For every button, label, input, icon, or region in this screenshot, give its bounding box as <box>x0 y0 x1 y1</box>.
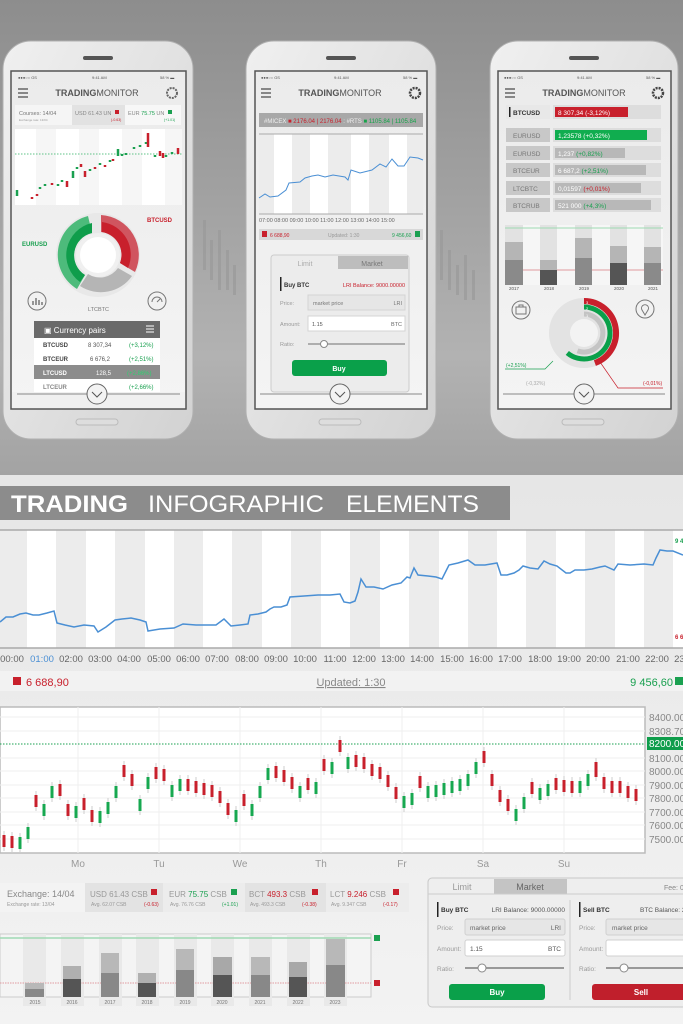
currency bars list: LTCBTC <box>513 186 538 193</box>
currency bars list: 521 000 (+4,3%) <box>558 203 606 210</box>
currency pairs panel: 128,5 <box>96 371 112 377</box>
yearly bar chart: 2016 <box>66 1000 78 1006</box>
header: hamburger, title, gear <box>18 88 177 98</box>
ring chart: (-0,01%) <box>643 381 663 387</box>
order form: LRI Balance: 9000.00000 <box>343 283 405 289</box>
currency bars list: 1,23578 (+0,32%) <box>558 133 610 140</box>
mini candle chart <box>15 129 182 205</box>
exchange rates row: EUR 75.75 CSB <box>169 890 227 899</box>
big intraday line chart: 08:00 <box>235 654 259 665</box>
buy section: LRI <box>551 925 561 932</box>
exchange rates row: Avg. 493.3 CSB <box>250 902 286 908</box>
yearly bar chart: 2023 <box>329 1000 341 1006</box>
currency pairs panel: (+2,86%) <box>127 371 152 377</box>
currency pairs panel: BTCUSD <box>43 343 69 349</box>
ticker bar: #MICEX ■ 2176.04 | 2176.04 : #RTS ■ 1105.84 | 1105.84 <box>264 119 417 125</box>
icon: bar chart circle <box>28 292 46 310</box>
order form: LRI <box>393 301 402 307</box>
candlestick chart: Th <box>315 859 327 870</box>
currency pairs panel: (+2,51%) <box>129 357 154 363</box>
big intraday line chart: 05:00 <box>147 654 171 665</box>
phone middle: 58 % ▬ <box>403 75 417 80</box>
ring chart <box>505 300 663 388</box>
buy section: LRI Balance: 9000.00000 <box>492 907 565 914</box>
yearly bar chart: 2022 <box>292 1000 304 1006</box>
currency pairs panel: (+3,12%) <box>129 343 154 349</box>
order form: Buy BTC <box>284 283 310 289</box>
background bottom <box>0 475 683 1024</box>
sell section: market price <box>612 925 648 932</box>
courses row <box>15 105 181 125</box>
yearly bar chart: 2015 <box>29 1000 41 1006</box>
price row: Updated: 1:30 <box>328 233 360 239</box>
courses row: EUR 75.75 UN <box>128 111 164 117</box>
header <box>261 88 420 98</box>
big intraday line chart: 10:00 <box>293 654 317 665</box>
phone middle <box>246 41 436 439</box>
yearly bar chart: 2018 <box>141 1000 153 1006</box>
buy section: BTC <box>548 946 561 953</box>
price summary row <box>0 671 683 691</box>
big intraday line chart: 21:00 <box>616 654 640 665</box>
currency pairs panel: BTCEUR <box>43 357 69 363</box>
buy section: Amount: <box>437 946 461 953</box>
order form: Ratio: <box>280 342 295 348</box>
ring chart: 2 <box>586 306 589 311</box>
exchange rates row: Avg. 62.07 CSB <box>91 902 127 908</box>
phone right: 9:41 AM <box>577 75 592 80</box>
courses row: Courses: 14/04 <box>19 111 56 117</box>
phone middle: 9:41 AM <box>334 75 349 80</box>
scroll control <box>260 384 422 404</box>
scroll control <box>503 384 665 404</box>
price summary row: 6 688,90 <box>26 677 69 689</box>
buy section: Buy BTC <box>441 907 469 914</box>
order form <box>271 255 409 392</box>
big intraday line chart: 01:00 <box>30 654 54 665</box>
line chart: 07:00 08:00 09:00 10:00 11:00 12:00 13:00 14:00 15:00 <box>259 218 395 224</box>
phone right <box>490 41 678 439</box>
big intraday line chart: 02:00 <box>59 654 83 665</box>
order panel: buy / sell: Market <box>516 882 544 892</box>
icon: briefcase <box>512 301 530 319</box>
price summary row: Updated: 1:30 <box>316 677 386 689</box>
candlestick chart <box>0 707 683 870</box>
big intraday line chart: 13:00 <box>381 654 405 665</box>
big intraday line chart: 03:00 <box>88 654 112 665</box>
exchange rates row: (-0.17) <box>383 902 398 908</box>
order form: BTC <box>391 322 402 328</box>
order panel: buy / sell <box>428 878 683 1007</box>
sell section: Sell BTC <box>583 907 610 914</box>
big intraday line chart: 00:00 <box>0 654 24 665</box>
currency pairs panel: 6 676,2 <box>90 357 111 363</box>
candlestick chart: Mo <box>71 859 85 870</box>
order form: Market <box>361 261 383 268</box>
candlestick chart: Sa <box>477 859 490 870</box>
icon: location pin <box>636 300 654 318</box>
header: TRADINGMONITOR <box>542 88 626 98</box>
big intraday line chart: 14:00 <box>410 654 434 665</box>
ring chart: 1 <box>586 313 589 318</box>
order form: Limit <box>298 261 312 268</box>
currency bars list: BTCRUB <box>513 203 540 210</box>
courses row: USD 61.43 UN <box>75 111 111 117</box>
bar chart: 2021 <box>648 286 659 291</box>
currency bars list: 0,01597 (+0,01%) <box>558 186 610 193</box>
bar chart: 2018 <box>544 286 555 291</box>
exchange rates row: USD 61.43 CSB <box>90 890 148 899</box>
big intraday line chart <box>0 530 683 665</box>
exchange rates row: LCT 9.246 CSB <box>330 890 386 899</box>
big intraday line chart: 20:00 <box>586 654 610 665</box>
header: TRADINGMONITOR <box>298 88 382 98</box>
yearly bar chart: 2021 <box>254 1000 266 1006</box>
candlestick chart: Tu <box>153 859 165 870</box>
header: hamburger, title, gear: TRADINGMONITOR <box>55 88 139 98</box>
icon: gauge circle <box>148 292 166 310</box>
currency pairs panel: 8 307,34 <box>88 343 112 349</box>
title banner: TRADING <box>11 491 128 518</box>
scroll control <box>12 384 185 408</box>
phone right: 58 % ▬ <box>646 75 660 80</box>
ticker bar <box>259 113 423 127</box>
sell section: Amount: <box>579 946 603 953</box>
exchange rates row: Exchange: 14/04 <box>7 889 75 899</box>
yearly bar chart: 2019 <box>179 1000 191 1006</box>
buy section: market price <box>470 925 506 932</box>
order form: Price: <box>280 301 295 307</box>
phone right: ●●●○○ GS <box>504 75 523 80</box>
bar chart <box>505 225 663 291</box>
currency bars list: BTCUSD <box>513 110 540 117</box>
yearly bar chart: 2017 <box>104 1000 116 1006</box>
exchange rates row: (+1.01) <box>222 902 238 908</box>
big intraday line chart: 12:00 <box>352 654 376 665</box>
currency pairs panel: LTCEUR <box>43 385 68 391</box>
big intraday line chart: 09:00 <box>264 654 288 665</box>
title banner: ELEMENTS <box>346 491 479 518</box>
phone middle: ●●●○○ GS <box>261 75 280 80</box>
line chart <box>259 134 423 224</box>
exchange rates row: Avg. 9.347 CSB <box>331 902 367 908</box>
bar chart: 2020 <box>614 286 625 291</box>
exchange rates row: (-0.38) <box>302 902 317 908</box>
big intraday line chart: 06:00 <box>176 654 200 665</box>
currency pairs panel: LTCUSD <box>43 371 68 377</box>
status bar: ●●●○○ GS <box>18 75 37 80</box>
title banner <box>0 486 510 520</box>
title banner: INFOGRAPHIC <box>148 491 324 518</box>
currency bars list <box>506 105 661 212</box>
candlestick chart: We <box>233 859 248 870</box>
currency bars list: 1,237 (+0,82%) <box>558 151 603 158</box>
big intraday line chart: 22:00 <box>645 654 669 665</box>
order form: Buy <box>332 366 346 373</box>
candlestick chart: Fr <box>397 859 407 870</box>
big intraday line chart: 16:00 <box>469 654 493 665</box>
currency bars list: BTCEUR <box>513 168 540 175</box>
big intraday line chart: 11:00 <box>323 654 347 665</box>
header <box>505 88 663 98</box>
currency pairs panel: ▣ Currency pairs <box>44 326 106 335</box>
big intraday line chart: 18:00 <box>528 654 552 665</box>
currency bars list: EURUSD <box>513 151 541 158</box>
donut chart: LTCBTC <box>88 307 109 313</box>
big intraday line chart: 17:00 <box>498 654 522 665</box>
exchange rates row: (-0.63) <box>144 902 159 908</box>
price summary row: 9 456,60 <box>630 677 673 689</box>
sell section: Ratio: <box>579 966 596 973</box>
yearly bar chart <box>0 934 380 1006</box>
donut chart <box>22 215 173 313</box>
order form: market price <box>313 301 343 307</box>
buy section <box>437 902 565 1000</box>
ring chart: (+2,51%) <box>506 363 527 369</box>
bar chart: 2019 <box>579 286 590 291</box>
exchange rates row: BCT 493.3 CSB <box>249 890 306 899</box>
sell section <box>579 902 683 1000</box>
sell section: Sell <box>634 988 648 997</box>
sell section: Price: <box>579 925 596 932</box>
courses row: Exchange rate: 13/04 <box>19 118 48 122</box>
currency bars list: 8 307,34 (-3,12%) <box>558 110 610 117</box>
background top <box>0 0 683 475</box>
big intraday line chart: 15:00 <box>440 654 464 665</box>
yearly bar chart: 2020 <box>216 1000 228 1006</box>
currency pairs panel: (+2,66%) <box>129 385 154 391</box>
candlestick chart: Su <box>558 859 570 870</box>
big intraday line chart: 07:00 <box>205 654 229 665</box>
bar chart: 2017 <box>509 286 520 291</box>
exchange rates row <box>0 883 409 912</box>
exchange rates row: Avg. 76.76 CSB <box>170 902 206 908</box>
ring chart: (-0,32%) <box>526 381 546 387</box>
price row <box>259 229 423 240</box>
donut chart: BTCUSD <box>147 218 173 224</box>
buy section: Ratio: <box>437 966 454 973</box>
phone left: 58 % ▬ <box>160 75 174 80</box>
order form: 1.15 <box>312 322 323 328</box>
big intraday line chart: 04:00 <box>117 654 141 665</box>
buy section: Buy <box>489 988 505 997</box>
big intraday line chart: 19:00 <box>557 654 581 665</box>
price row: 9 456,60 <box>392 233 412 239</box>
courses row: (+1.01) <box>164 118 175 122</box>
buy section: 1.15 <box>470 946 483 953</box>
currency bars list: EURUSD <box>513 133 541 140</box>
decorative background candles <box>203 220 475 300</box>
exchange rates row: Exchange rate: 13/04 <box>7 902 55 908</box>
currency pairs panel <box>34 321 160 396</box>
phone left: 9:41 AM <box>92 75 107 80</box>
order panel: buy / sell: Limit <box>452 882 472 892</box>
order form: Amount: <box>280 322 301 328</box>
currency bars list: 6 687,2 (+2,51%) <box>558 168 608 175</box>
phone left <box>3 41 193 439</box>
donut chart: EURUSD <box>22 242 48 248</box>
price row: 6 688,90 <box>270 233 290 239</box>
buy section: Price: <box>437 925 454 932</box>
ring chart: 3 <box>586 300 589 305</box>
courses row: (-0.63) <box>111 118 121 122</box>
